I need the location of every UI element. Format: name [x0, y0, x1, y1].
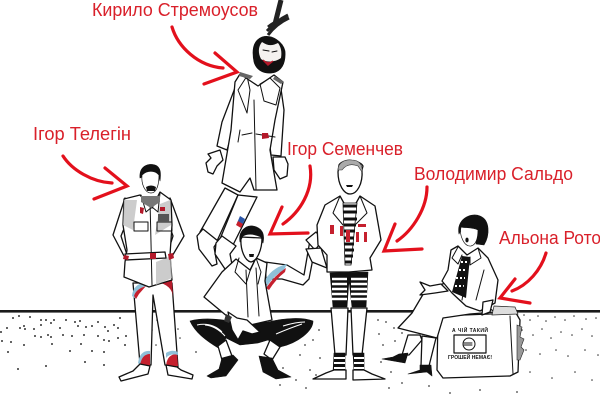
arrow: to Рото: [500, 253, 546, 303]
polka blouse: [452, 256, 470, 298]
socks: [218, 340, 232, 360]
shoes: [119, 364, 150, 381]
socks: [333, 353, 345, 372]
figure: Telegin: [113, 164, 193, 381]
hand on case: [482, 300, 493, 315]
arms: [113, 198, 130, 258]
shoulder straps: [239, 72, 284, 84]
figure: squatting man: [190, 226, 327, 379]
torso: [204, 258, 272, 326]
label: Володимир Сальдо: Володимир Сальдо: [414, 164, 573, 184]
boots: [197, 229, 218, 266]
trousers: [133, 283, 178, 367]
arrow: to Стремоусов: [172, 27, 237, 84]
arrow: to Семенчев: [270, 166, 311, 234]
suitcase: [437, 313, 520, 378]
head: [241, 237, 262, 262]
suitcase label: currency sticker: [448, 326, 492, 361]
head: [253, 36, 285, 73]
head: [459, 215, 488, 245]
label: Кирило Стремоусов: Кирило Стремоусов: [92, 0, 258, 20]
hand right: [273, 157, 288, 179]
arrow: to Телегін: [63, 156, 127, 199]
shoes: [313, 370, 346, 379]
label: Ігор Телегін: Ігор Телегін: [33, 124, 131, 144]
striped shorts: [330, 272, 368, 307]
horizon line: [0, 310, 600, 313]
raised arm: [265, 240, 316, 285]
jacket: [317, 196, 381, 272]
figure: striped man: [313, 160, 385, 380]
trousers: [190, 318, 313, 349]
shoes: [207, 355, 238, 378]
rope: [275, 0, 281, 24]
ground speckle: [1, 315, 598, 393]
rainbow stripes on trousers: [132, 282, 146, 299]
suitcase label: currency sticker: ГРОШЕЙ НЕМАЄ!: [448, 353, 492, 361]
arrow: to Сальдо: [384, 187, 427, 251]
jacket: [442, 246, 498, 311]
coat: [222, 74, 283, 192]
suitcase label: currency sticker: А ЧІЙ ТАКИЙ: [452, 326, 488, 334]
figure: seated woman on suitcase: [382, 215, 524, 378]
head: [140, 164, 160, 181]
legs: [331, 308, 348, 355]
arms: [217, 80, 238, 150]
shoes: [382, 353, 408, 363]
hand left: [206, 150, 223, 174]
head: [338, 161, 363, 194]
shirt: [123, 192, 172, 287]
legs: [402, 335, 422, 355]
held paper: [306, 232, 323, 250]
hand and cuff: [228, 312, 260, 340]
skirt: [398, 283, 495, 338]
striped shirt: [343, 203, 357, 265]
figure: hanged man: [197, 0, 289, 272]
legs: [200, 188, 238, 241]
label: Ігор Семенчев: Ігор Семенчев: [287, 139, 403, 159]
hand on knee: [420, 282, 448, 295]
